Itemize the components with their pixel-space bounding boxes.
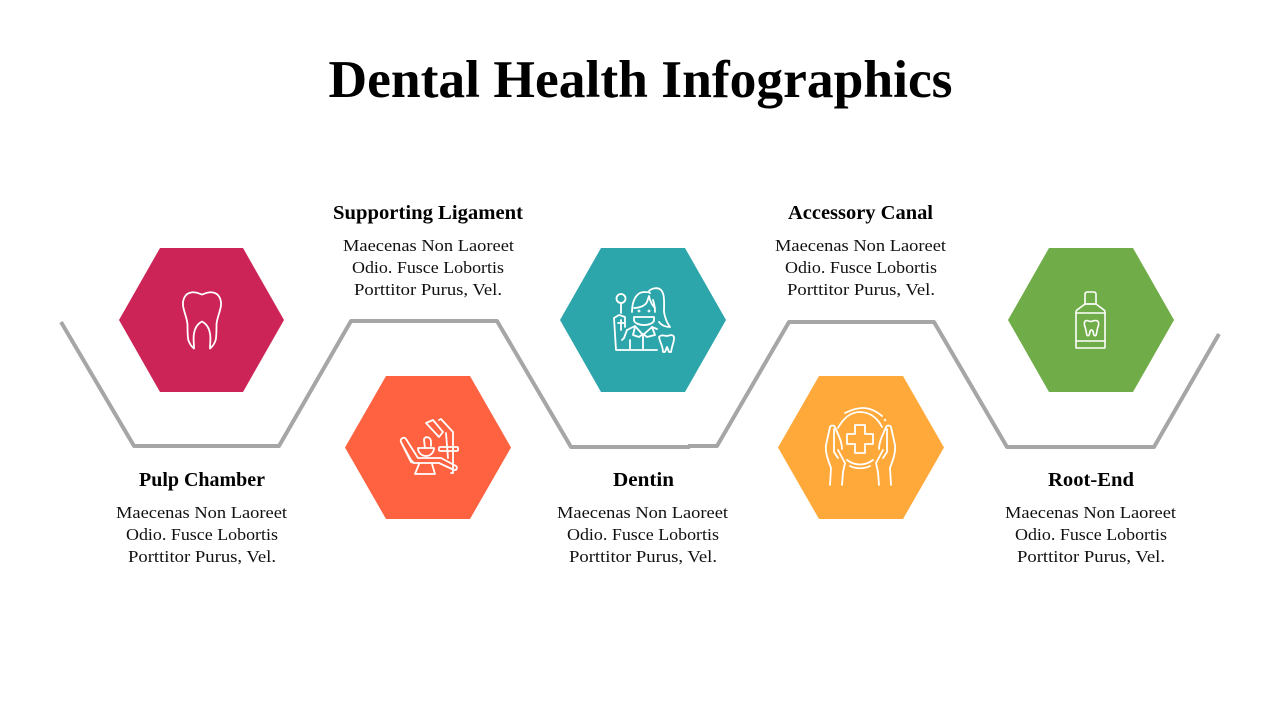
text block: pulp chamber: Porttitor Purus, Vel. xyxy=(128,547,276,566)
text block: dentin: Odio. Fusce Lobortis xyxy=(567,525,719,544)
text block: dentin: Dentin xyxy=(613,469,674,491)
icon: dentist xyxy=(614,288,674,352)
text block: root-end: Porttitor Purus, Vel. xyxy=(1017,547,1165,566)
text block: dentin xyxy=(557,469,728,566)
icon: dental chair xyxy=(401,419,458,474)
text block: root-end: Maecenas Non Laoreet xyxy=(1005,503,1176,522)
text block: accessory canal: Accessory Canal xyxy=(788,202,933,224)
connector line: right section xyxy=(688,322,1219,447)
hexagon: pulp chamber xyxy=(119,248,284,392)
text block: accessory canal: Maecenas Non Laoreet xyxy=(775,236,946,255)
hexagon: root-end xyxy=(1008,248,1174,392)
text block: supporting ligament: Maecenas Non Laoreet xyxy=(343,236,514,255)
icon: mouthwash bottle xyxy=(1076,292,1105,348)
text block: pulp chamber xyxy=(116,469,287,566)
text block: accessory canal: Odio. Fusce Lobortis xyxy=(785,258,937,277)
text block: accessory canal: Porttitor Purus, Vel. xyxy=(787,280,935,299)
hexagon: accessory canal xyxy=(778,376,944,519)
connector line: left section xyxy=(61,321,690,447)
text block: pulp chamber: Odio. Fusce Lobortis xyxy=(126,525,278,544)
icon: hands with medical cross xyxy=(826,408,895,485)
hexagon: dentin xyxy=(560,248,726,392)
text block: root-end: Root-End xyxy=(1048,469,1134,491)
text block: accessory canal xyxy=(775,202,946,299)
text block: supporting ligament: Porttitor Purus, Vel. xyxy=(354,280,502,299)
icon: tooth xyxy=(183,292,221,348)
text block: pulp chamber: Pulp Chamber xyxy=(139,469,265,491)
hexagon: supporting ligament xyxy=(345,376,511,519)
text block: root-end xyxy=(1005,469,1176,566)
text block: supporting ligament: Odio. Fusce Lobortis xyxy=(352,258,504,277)
text block: pulp chamber: Maecenas Non Laoreet xyxy=(116,503,287,522)
text block: supporting ligament: Supporting Ligament xyxy=(333,202,523,224)
title: Dental Health Infographics xyxy=(328,51,952,109)
text block: dentin: Porttitor Purus, Vel. xyxy=(569,547,717,566)
text block: supporting ligament xyxy=(333,202,523,299)
text block: dentin: Maecenas Non Laoreet xyxy=(557,503,728,522)
text block: root-end: Odio. Fusce Lobortis xyxy=(1015,525,1167,544)
